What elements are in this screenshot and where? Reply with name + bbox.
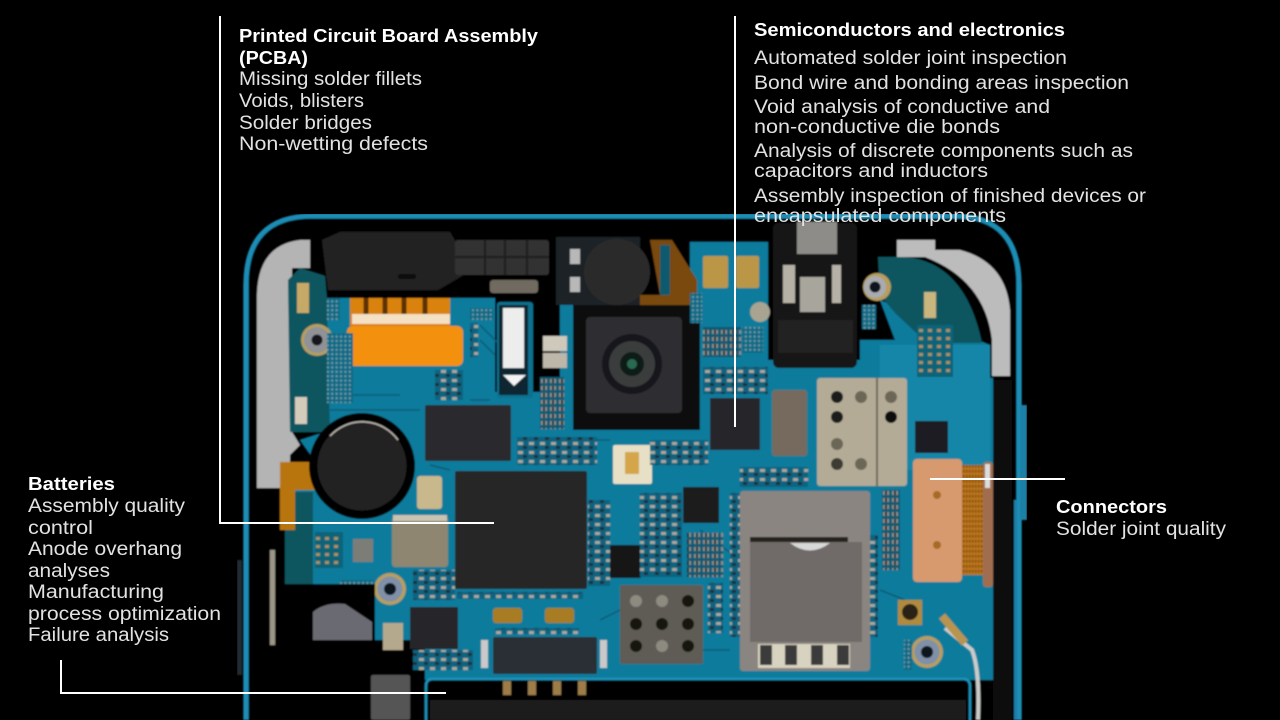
lens module, bottom left [270,550,410,720]
text block: batteries: Failure analysis [28,625,169,646]
screw holes [301,273,943,668]
text block: semiconductors and electronics: Automated solder joint inspection [754,48,1067,69]
camera [573,305,700,430]
phone frame [237,214,1027,720]
text block: PCBA: Non-wetting defects [239,134,428,155]
main blue board [290,242,993,680]
gold capacitors [493,256,922,625]
black top-left module [322,232,549,293]
SIM card holder [740,491,870,671]
coin vibration motor [309,413,415,519]
teal wedge, right [878,257,982,343]
text block: semiconductors and electronics: encapsulated components [754,206,1006,227]
speaker [556,237,650,305]
circuit traces [330,325,905,650]
text block: PCBA: Voids, blisters [239,91,364,112]
text block: batteries [28,473,221,646]
flex near speaker [640,240,697,305]
battery indicator arrow [497,302,533,398]
text block: batteries: control [28,518,93,539]
callout: semiconductors leader line [734,16,736,427]
antenna cable [942,616,978,720]
screen panel [426,679,970,720]
audio jack [750,222,857,368]
text block: PCBA: Missing solder fillets [239,69,422,90]
text block: connectors [1056,496,1227,540]
callout: PCBA leader line [220,16,494,523]
callout: batteries leader line [61,660,446,693]
text block: batteries: Batteries [28,473,115,494]
text block: batteries: Manufacturing [28,582,164,603]
lighter board area, right [880,345,990,470]
white plastic trim, left [257,240,310,488]
text block: semiconductors and electronics [754,19,1147,227]
callout: connectors leader line [930,478,1065,480]
text block: semiconductors and electronics: Assembly inspection of finished devices or [754,186,1147,207]
text block: semiconductors and electronics: Semiconductors and electronics [754,19,1065,40]
text block: batteries: process optimization [28,604,221,625]
text block: PCBA [239,25,539,155]
text block: semiconductors and electronics: non-conductive die bonds [754,117,1000,138]
metal components [353,390,807,650]
text block: PCBA: Solder bridges [239,113,372,134]
dark teal board areas [285,268,330,584]
second metal shield [620,585,703,664]
text block: batteries: analyses [28,561,110,582]
dark right strip [993,380,1012,720]
text block: semiconductors and electronics: Analysis of discrete components such as [754,141,1133,162]
text block: PCBA: (PCBA) [239,47,308,68]
text block: semiconductors and electronics: capacitors and inductors [754,161,988,182]
text block: batteries: Anode overhang [28,539,182,560]
black connector [481,637,607,674]
small metal caps [295,283,936,484]
chips [410,398,948,649]
white plastic trim, right [897,240,1010,376]
text block: PCBA: Printed Circuit Board Assembly [239,25,539,46]
small component clusters [315,293,953,670]
text block: connectors: Connectors [1056,496,1167,517]
photo: phone circuit board [237,214,1027,720]
copper connector [913,459,993,587]
orange flex connector [347,298,463,366]
text block: semiconductors and electronics: Void analysis of conductive and [754,97,1050,118]
metal shield with holes [817,378,907,486]
orange flex, left [280,462,322,530]
text block: batteries: Assembly quality [28,496,186,517]
text block: connectors: Solder joint quality [1056,519,1227,540]
text block: semiconductors and electronics: Bond wire and bonding areas inspection [754,73,1129,94]
